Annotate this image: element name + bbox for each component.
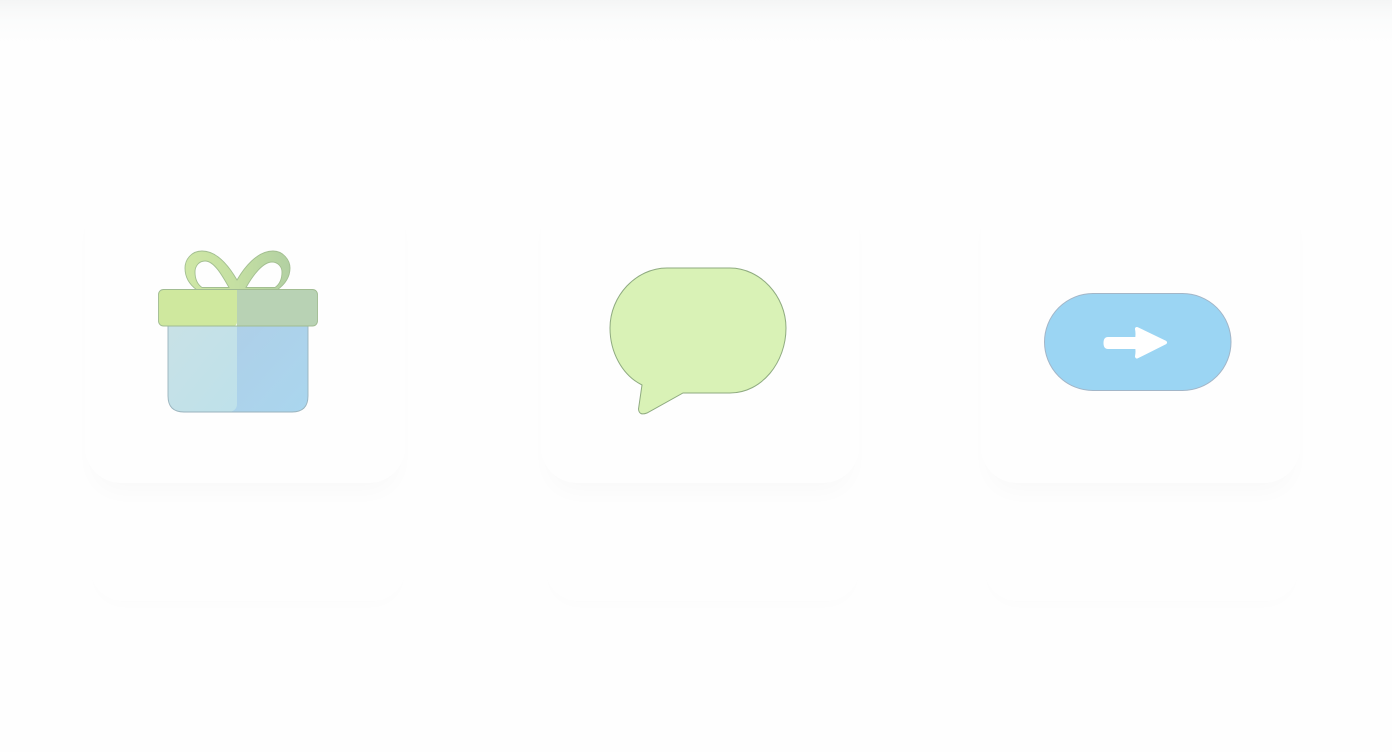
panel: speech bubble card bbox=[541, 186, 859, 483]
gift ribbon bow bbox=[185, 251, 290, 290]
gift box body bbox=[168, 326, 308, 412]
panel: gift card bbox=[85, 186, 405, 483]
pill button bbox=[1044, 294, 1231, 390]
panel: arrow button card bbox=[981, 186, 1300, 483]
back card: right bbox=[984, 470, 1299, 601]
back card: left bbox=[90, 470, 406, 601]
back card: middle bbox=[545, 470, 860, 601]
icon: gift box bbox=[158, 251, 318, 412]
icon: speech bubble bbox=[610, 268, 786, 414]
white arrow bbox=[1106, 329, 1165, 356]
gift box lid bbox=[158, 290, 318, 326]
icon: arrow button bbox=[1044, 294, 1231, 390]
